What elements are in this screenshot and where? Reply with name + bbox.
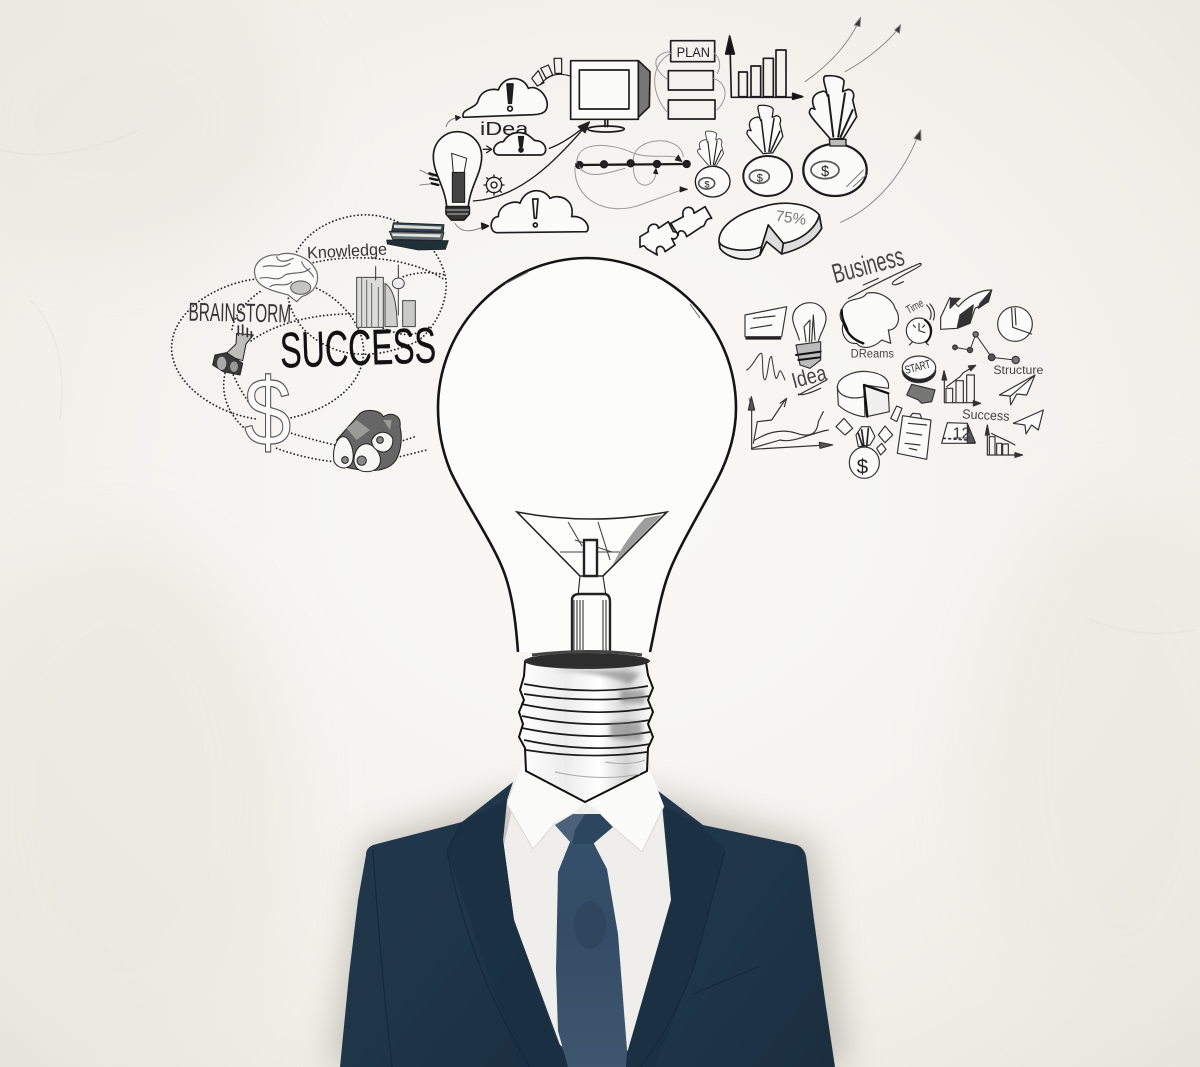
icon: desk calendar [942,423,975,443]
plan flow boxes: PLAN [677,44,710,60]
label: Time: Time [904,297,926,317]
icon: dollar sign: $ [244,358,291,466]
icon: city buildings [357,265,415,327]
icon: money bag with bills [836,406,902,478]
icon: signal waveform [747,353,785,380]
label: Business: Business [829,240,907,289]
left sketch cluster: brainstorm to success [172,215,448,472]
icon: falling bar chart [985,425,1023,457]
bulb filament funnel [517,512,667,655]
icon: small money bag [695,131,730,197]
bar chart [726,36,803,99]
icon: 3D pie chart [837,371,889,417]
icon: large money bag: $ [821,164,829,180]
icon: gear [484,175,504,195]
icon: paper plane large [999,375,1035,405]
icon: medium money bag [743,105,792,196]
icon: large money bag [803,76,867,196]
right sketch cluster: business doodles [745,240,1044,478]
icon: dreams speech cloud [840,293,898,347]
shirt [504,762,672,1067]
icon: large exclamation cloud [455,191,588,233]
icon: exclamation cloud [446,79,547,127]
icon: alarm clock [906,304,934,345]
label: Idea: iDea [480,118,529,139]
label: Business [829,240,921,298]
bulb screw socket [519,652,653,802]
icon: books stack [387,223,448,250]
icon: small light bulb [420,132,482,220]
main light bulb head [438,258,752,802]
tie [555,814,627,1067]
pie chart 75% [719,203,822,259]
icon: brain [254,253,318,302]
icon: bulb with gears [793,303,826,368]
label: Brainstorm: BRAINSTORM [188,297,291,328]
businessman in suit [330,762,850,1067]
suit shadow [330,795,850,1067]
icon: money bag with bills: $ [857,455,869,478]
pie chart 75%: 75% [774,208,808,229]
shirt collar [507,762,664,852]
label: Success: SUCCESS [279,317,437,379]
icon: start button: START [904,359,932,377]
icon: paper plane small [1013,410,1043,434]
icon: desk calendar: 12 [953,426,971,443]
dotted connection network [172,215,446,462]
icon: speech bubble [907,384,935,403]
bulb glass outline [438,258,736,652]
icon: line chart with arrows [748,397,833,449]
icon: clipboard [897,413,931,459]
icon: small bars arc [532,58,570,86]
icon: medium money bag: $ [757,172,764,184]
timeline with nodes [575,141,690,209]
label: Idea: Idea [789,360,830,393]
icon: note card [745,307,787,338]
icon: success bar chart [942,365,981,406]
icon: start button [902,356,936,383]
structure node line [953,332,1019,364]
growth arrows [805,17,921,222]
icon: puzzle pieces [640,207,712,255]
label: Dreams: DReams [851,346,894,360]
plan flow boxes [655,41,725,119]
icon: bent block arrow [941,290,992,329]
label: Knowledge: Knowledge [307,239,387,263]
label: Structure: Structure [993,363,1044,377]
label: Success: Success [962,406,1010,424]
icon: money bags pile [334,410,401,472]
icon: computer monitor [571,61,650,132]
suit jacket [340,782,835,1067]
top sketch cluster: idea to profit [420,17,921,259]
icon: chess rook [213,325,253,375]
arrow: bulb to monitor [473,122,589,201]
icon: small idea cloud [483,125,587,155]
icon: small money bag: $ [704,179,710,189]
icon: pie clock [998,307,1032,341]
